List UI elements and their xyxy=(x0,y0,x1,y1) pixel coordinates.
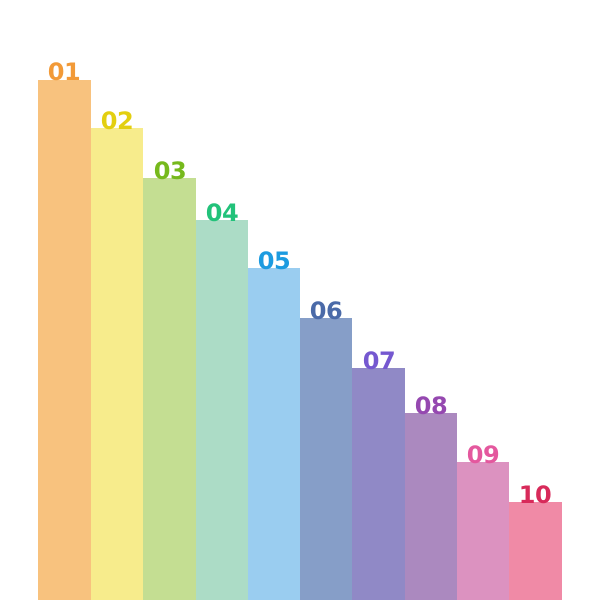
label 08: 08 xyxy=(415,392,447,420)
label 07: 07 xyxy=(363,347,395,375)
label 09: 09 xyxy=(467,441,499,469)
bar 02 xyxy=(91,128,143,600)
bar 01 xyxy=(38,80,91,600)
label 03: 03 xyxy=(154,157,186,185)
bar 10 xyxy=(509,502,562,600)
bar 04 xyxy=(196,220,248,600)
bar 08 xyxy=(405,413,457,600)
bar 03 xyxy=(143,178,196,600)
bar 06 xyxy=(300,318,352,600)
bar 07 xyxy=(352,368,405,600)
label 02: 02 xyxy=(101,107,133,135)
label 10: 10 xyxy=(519,481,551,509)
label 06: 06 xyxy=(310,297,342,325)
label 05: 05 xyxy=(258,247,290,275)
bar 05 xyxy=(248,268,300,600)
label 01: 01 xyxy=(48,58,80,86)
label 04: 04 xyxy=(206,199,238,227)
bar 09 xyxy=(457,462,509,600)
